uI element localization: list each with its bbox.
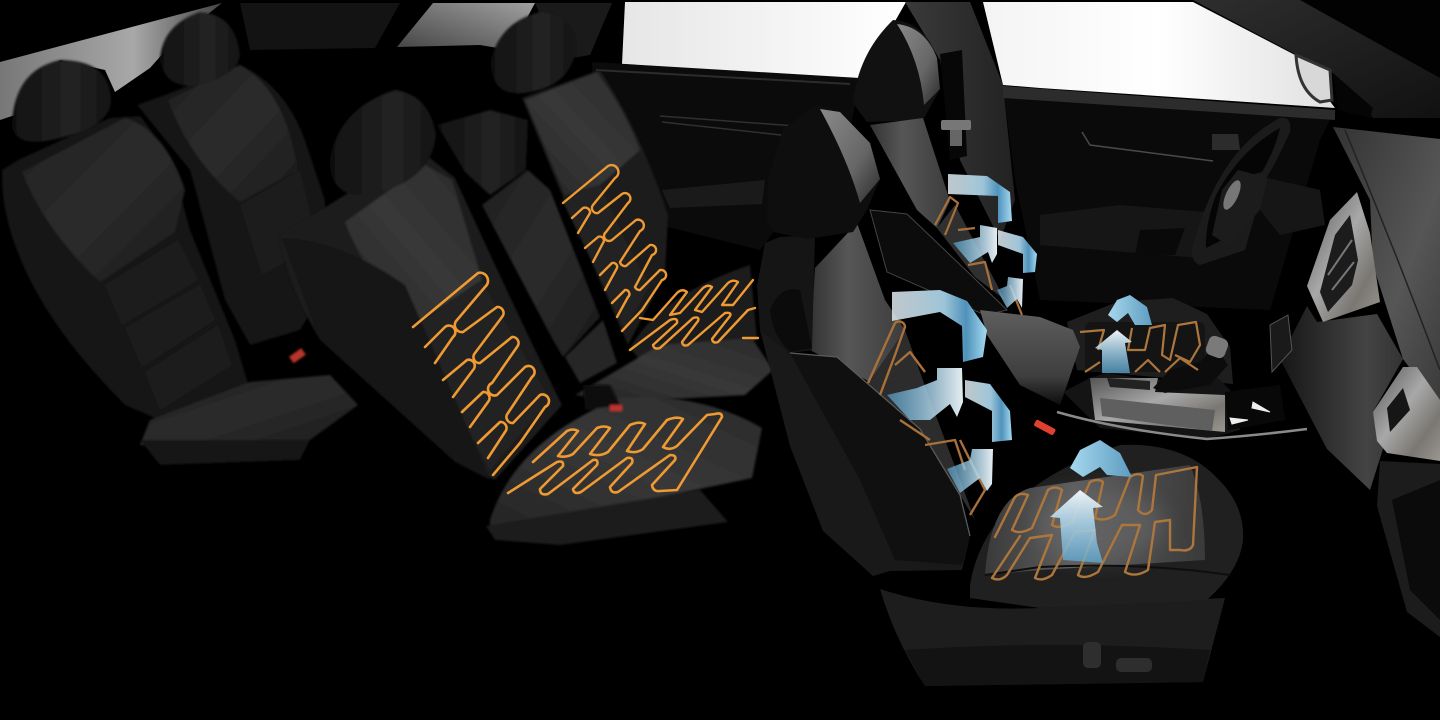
B-pillar with seat belt buckle (905, 2, 1015, 240)
side windows (622, 2, 1335, 108)
center stack with silver trim (1270, 192, 1380, 372)
second row centre armrest panel (437, 110, 617, 383)
armrest between front seats (980, 310, 1080, 405)
front far seat (853, 20, 1233, 384)
heating coil: second row right seatback (563, 165, 666, 331)
second row seat, left (280, 90, 762, 545)
front near seat (757, 105, 1243, 686)
airflow arrows: front far seatback (948, 174, 1037, 308)
front door panel (1003, 86, 1335, 310)
heating coil: front near seat cushion (992, 467, 1197, 579)
second row seat, right (491, 12, 773, 402)
dashboard upper padded panel (1333, 127, 1440, 408)
steering wheel (1192, 118, 1325, 265)
heating coil: second row right cushion (630, 280, 758, 350)
center console with shifter (1033, 334, 1307, 439)
A-pillar and mirror (1193, 0, 1440, 118)
rear windows (0, 3, 612, 120)
heating coil: front far seatback (935, 197, 1022, 315)
heating coil: front far seat cushion (1080, 322, 1200, 372)
air vent with silver trim (1373, 367, 1440, 461)
dashboard lower panel (1280, 306, 1440, 637)
heating coil: second row left cushion (508, 413, 722, 494)
heating coil: front near seatback (868, 321, 985, 515)
heating coil: second row left seatback (413, 273, 549, 475)
third row seat, right (137, 12, 328, 345)
airflow arrows: front near cushion (1050, 440, 1132, 563)
airflow arrows: front near seatback (887, 290, 1012, 493)
airflow arrows: front far cushion (1095, 295, 1152, 373)
third row seat, left (2, 60, 358, 465)
rear door panel (592, 62, 860, 250)
